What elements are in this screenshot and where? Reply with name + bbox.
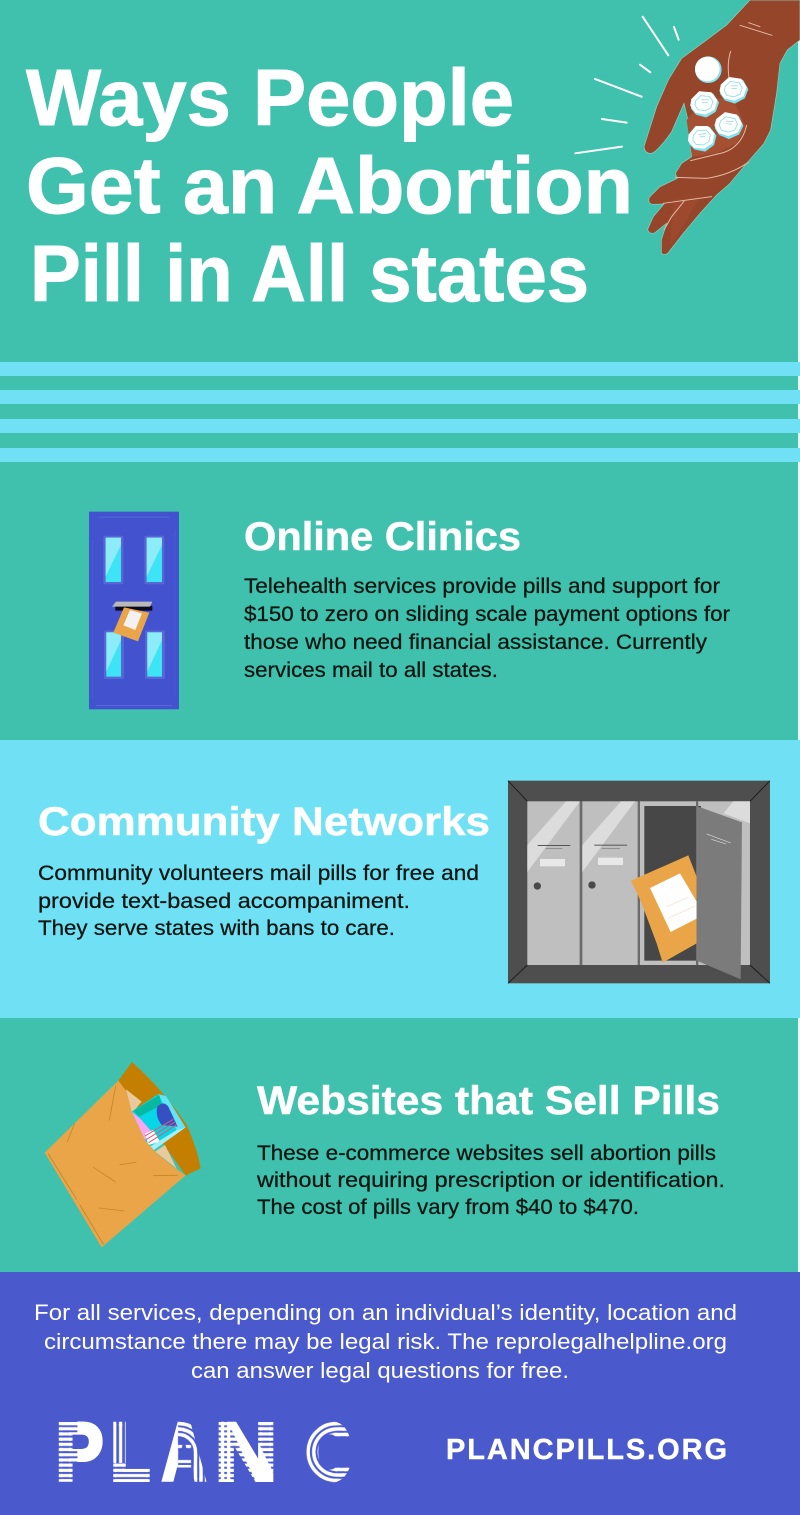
text: community networks description: Community volunteers mail pills for free and — [38, 862, 479, 885]
text: websites description: The cost of pills vary from $40 to $470. — [257, 1196, 639, 1219]
icon: sparkle lines — [575, 17, 679, 153]
panel: community networks background — [0, 740, 800, 1018]
text: legal risk note — [34, 1300, 737, 1383]
open mailbox door — [697, 806, 742, 979]
text: community networks description: They serve states with bans to care. — [38, 917, 395, 940]
heading: Online Clinics: Online Clinics — [244, 515, 521, 559]
icon: padded envelope with pill box — [45, 1062, 201, 1247]
envelope creases — [48, 1086, 177, 1244]
text: websites description — [256, 1142, 725, 1219]
door panel — [89, 512, 179, 709]
envelope in slot — [113, 607, 149, 641]
icon: hand crease lines — [663, 23, 772, 230]
panel: stripe band — [0, 362, 800, 462]
icon: pill 2 — [689, 91, 720, 119]
icon: hand — [644, 0, 800, 255]
title — [26, 53, 633, 318]
title: Get an Abortion — [26, 141, 633, 230]
text: legal risk note: circumstance there may be legal risk. The reprolegalhelpline.org — [44, 1329, 727, 1354]
package — [631, 855, 697, 963]
icon: door with mail slot — [89, 512, 179, 709]
door windows — [103, 536, 165, 679]
logo: PLAN C: L — [110, 1407, 150, 1498]
logo: PLAN C: P — [56, 1407, 103, 1498]
logo: PLAN C: C — [305, 1407, 351, 1498]
text: websites description: These e-commerce websites sell abortion pills — [257, 1142, 716, 1165]
logo: PLAN C: N — [215, 1407, 277, 1498]
logo: PLAN C — [56, 1407, 351, 1498]
open mailbox interior — [640, 801, 750, 965]
text: websites description: without requiring prescription or identification. — [256, 1169, 725, 1192]
title: Pill in All states — [30, 229, 589, 318]
text: online clinics description: $150 to zero on sliding scale payment options for — [244, 603, 730, 626]
icon: hand holding abortion pills — [575, 0, 800, 255]
envelope body — [45, 1081, 186, 1247]
text: community networks description — [38, 862, 479, 940]
icon: pill 1 — [718, 76, 750, 105]
mailbox frame — [508, 781, 770, 983]
pill box — [132, 1094, 186, 1150]
panel: footer background — [0, 1272, 800, 1515]
heading: Community Networks: Community Networks — [38, 800, 490, 844]
icon: pill 3 — [712, 111, 745, 141]
envelope lining — [126, 1089, 177, 1169]
text: legal risk note: For all services, depending on an individual’s identity, location and — [34, 1300, 737, 1325]
title: Ways People — [26, 53, 514, 142]
logo: PLAN C: A — [162, 1407, 206, 1498]
text: online clinics description: Telehealth services provide pills and support for — [244, 575, 720, 598]
panel: header background — [0, 0, 800, 362]
text: website link: PLANCPILLS.ORG — [446, 1434, 727, 1466]
text: legal risk note: can answer legal questions for free. — [191, 1358, 569, 1383]
text: online clinics description: services mail to all states. — [244, 659, 498, 682]
text: community networks description: provide text-based accompaniment. — [38, 890, 410, 913]
text: online clinics description — [244, 575, 730, 682]
icon: mailboxes with package — [508, 781, 770, 983]
envelope flap — [118, 1062, 201, 1175]
mail slot — [112, 602, 152, 611]
heading: Websites that Sell Pills: Websites that Sell Pills — [257, 1079, 720, 1123]
icon: round pill — [695, 56, 722, 83]
text: online clinics description: those who need financial assistance. Currently — [244, 631, 708, 654]
mailbox doors closed — [527, 801, 638, 965]
icon: pill 4 — [688, 126, 716, 152]
